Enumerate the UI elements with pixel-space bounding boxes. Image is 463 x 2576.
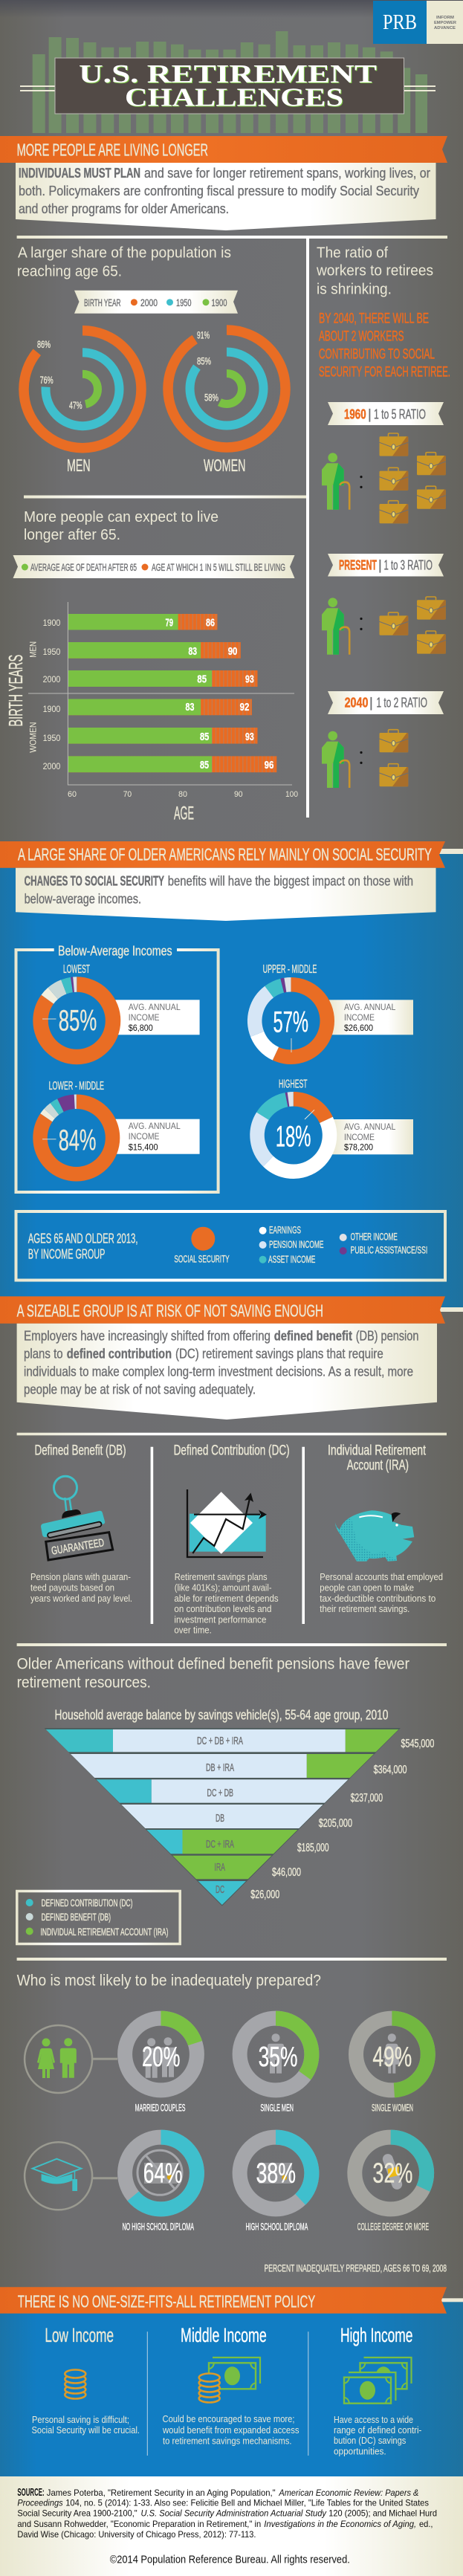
source note: Social Security Area 1900-2100," [17, 2508, 137, 2519]
orange statement: by 2040 [319, 311, 450, 381]
bar chart: life expectancy: BIRTH YEARS [4, 655, 27, 727]
source note: Investigations in the Economics of Aging, [264, 2519, 416, 2529]
column: low income: Low Income [45, 2324, 114, 2346]
column: defined benefit: Pension plans with guaran- [30, 1572, 131, 1582]
heading: ratio of workers [316, 245, 433, 298]
column: middle income: to retirement savings mechanisms. [163, 2435, 291, 2446]
saving callout: defined benefit [274, 1328, 352, 1343]
funnel chart: savings balance: DC [216, 1883, 224, 1896]
column: defined contribution: (like 401Ks); amount avail- [175, 1583, 272, 1593]
donut: married couples: 20% [142, 2042, 180, 2073]
logo: PRB: ADVANCE [434, 26, 456, 30]
divider [17, 1433, 447, 1435]
donut: upper-middle: $26,600 [344, 1023, 373, 1033]
legend: savings vehicles: DEFINED BENEFIT (DB) [42, 1911, 111, 1923]
icon: coins [65, 2369, 85, 2399]
legend: age of death: AGE AT WHICH 1 IN 5 WILL STILL BE LIVING [152, 562, 285, 573]
intro callout: both. Policymakers are confronting fiscal pressure to modify Social Security [19, 184, 419, 198]
chart: women radial rings: 91% [197, 329, 210, 341]
bar chart: life expectancy: 1900 [43, 619, 60, 628]
copyright: ©2014 Population Reference Bureau. All rights reserved. [110, 2553, 350, 2566]
bar chart: life expectancy: 90 [228, 645, 237, 658]
banner: more people are living longer: MORE PEOPLE ARE LIVING LONGER [17, 140, 208, 159]
legend: birth year: 1900 [211, 297, 227, 308]
heading: live longer: More people can expect to live [24, 509, 218, 525]
donut: lower-middle: LOWER - MIDDLE [49, 1080, 104, 1093]
column: defined benefit: years worked and pay level. [30, 1593, 132, 1604]
background: blue policy section [0, 2302, 463, 2476]
donut: single men [240, 2019, 311, 2114]
legend: age of death: AVERAGE AGE OF DEATH AFTER 65 [30, 562, 137, 573]
bar chart: life expectancy: 2000 [43, 763, 60, 771]
divider [24, 495, 306, 498]
background: blue social security section [0, 854, 463, 1307]
heading: larger share [17, 245, 231, 280]
donut: high school diploma [240, 2138, 311, 2233]
column dividers [147, 2331, 308, 2456]
saving callout: plans to [24, 1347, 63, 1362]
donut: married couples: MARRIED COUPLES [135, 2102, 186, 2114]
ratio ribbon: present: | [378, 558, 382, 573]
legend: age of death [13, 555, 294, 578]
bar chart: life expectancy: 90 [234, 790, 243, 799]
bar chart: life expectancy: WOMEN [28, 722, 39, 753]
heading: inadequately prepared: Who is most likely to be inadequately prepared? [17, 1973, 321, 1990]
saving callout [17, 1324, 437, 1420]
bar chart: life expectancy: 85 [200, 731, 209, 743]
donut: no high school diploma: NO HIGH SCHOOL DIPLOMA [122, 2221, 194, 2233]
column: IRA: Individual Retirement [328, 1443, 427, 1458]
donut: upper-middle: 57% [273, 1006, 308, 1039]
saving callout: (DB) pension [356, 1328, 418, 1343]
donut: lowest: $6,800 [129, 1023, 153, 1033]
background: lower gray section [0, 1307, 463, 2302]
orange statement: by 2040: ABOUT 2 WORKERS [319, 329, 404, 345]
heading: ratio of workers: is shrinking. [317, 282, 392, 298]
divider [17, 1958, 447, 1961]
source note: 120 (2005); and Michael Hurd [328, 2508, 437, 2519]
chart: women radial rings: WOMEN [204, 456, 245, 475]
saving callout: (DC) retirement savings plans that require [175, 1347, 383, 1362]
legend: income sources: EARNINGS [269, 1223, 301, 1235]
icon: guaranteed stamp [41, 1476, 113, 1560]
heading: live longer: longer after 65. [24, 527, 120, 543]
legend: savings vehicles: INDIVIDUAL RETIREMENT ACCOUNT (IRA) [40, 1926, 169, 1938]
chart: men radial rings: 76% [40, 374, 54, 386]
bar chart: life expectancy [4, 602, 298, 824]
donut: lower-middle [25, 1080, 200, 1189]
saving callout: Employers have increasingly shifted from offering [24, 1328, 271, 1343]
logo: PRB: INFORM [436, 16, 454, 20]
donut: college degree or more: 32% [372, 2158, 412, 2190]
bar chart: life expectancy: 96 [265, 759, 273, 771]
source note: David Wise (Chicago: University of Chicago Press, 2012): 77-113. [17, 2529, 256, 2540]
cream accent line beside banner 3 [440, 1307, 463, 1312]
bracket: below-average incomes [16, 944, 218, 1192]
funnel chart: savings balance: DC + DB + IRA [197, 1735, 243, 1747]
legend: birth year: 2000 [140, 297, 158, 308]
decorative green bar chart behind title [33, 31, 427, 133]
heading: fewer resources: retirement resources. [17, 1674, 151, 1692]
icon: investment chart [187, 1489, 267, 1557]
icon: graduation cap in circle [25, 2142, 117, 2210]
donut: upper-middle: INCOME [344, 1012, 375, 1023]
donut: lowest: AVG. ANNUAL [129, 1002, 181, 1012]
source note: U.S. Social Security Administration Actuarial Study [141, 2508, 327, 2519]
banner: no one-size-fits-all [0, 2287, 447, 2314]
banner: not saving enough [0, 1296, 445, 1324]
column: low income: Personal saving is difficult; [32, 2414, 129, 2425]
saving callout: defined contribution [67, 1347, 172, 1362]
bar chart: life expectancy: 70 [123, 790, 132, 799]
logo: PRB: EMPOWER [434, 21, 456, 25]
donut: highest: 18% [276, 1120, 311, 1153]
heading: larger share: reaching age 65. [17, 264, 122, 280]
funnel chart: savings balance: DC + IRA [206, 1838, 234, 1851]
column: defined contribution: Defined Contribution (DC) [174, 1443, 290, 1458]
donut: lower-middle: AVG. ANNUAL [129, 1121, 181, 1131]
chart: men radial rings: 47% [69, 399, 82, 411]
ratio ribbon: 1960: 1960 [344, 407, 366, 422]
column: high income: opportunities. [334, 2446, 386, 2457]
bar chart: life expectancy: 86 [206, 617, 215, 629]
legend: income sources: BY INCOME GROUP [28, 1246, 105, 1261]
funnel chart: savings balance: DB [216, 1812, 224, 1825]
icons: 1 retiree to 2 workers [322, 730, 408, 788]
legend: income sources: ASSET INCOME [268, 1253, 315, 1265]
column: defined contribution: on contribution levels and [174, 1604, 272, 1614]
bar chart: life expectancy: 83 [186, 701, 194, 713]
bar chart: life expectancy: 1900 [43, 705, 60, 714]
column: defined benefit: teed payouts based on [30, 1583, 114, 1593]
donut: single men: SINGLE MEN [260, 2102, 294, 2114]
source note: ed., [419, 2519, 433, 2529]
legend: birth year: BIRTH YEAR [84, 297, 120, 308]
legend: savings vehicles: DEFINED CONTRIBUTION (DC) [42, 1897, 132, 1909]
icons: 1 retiree to 3 workers [322, 597, 446, 655]
source note: James Poterba, "Retirement Security in an Aging Population," [47, 2488, 276, 2498]
bar chart: life expectancy: 80 [178, 790, 187, 799]
donut: highest: INCOME [344, 1132, 375, 1142]
heading: ratio of workers: The ratio of [317, 245, 388, 262]
column: IRA: Account (IRA) [347, 1458, 409, 1474]
bracket: below-average incomes: Below-Average Incomes [58, 944, 172, 959]
source note: 104, no. 5 (2014): 1-33. Also see: Felicitie Bell and Michael Miller, "Life Tables for the United States [65, 2498, 429, 2508]
bar chart: life expectancy: MEN [28, 641, 39, 658]
bar chart: life expectancy: 100 [285, 790, 298, 799]
bar chart: life expectancy: 60 [68, 790, 77, 799]
chart: women radial rings: 85% [197, 355, 211, 367]
icon: couple in circle [25, 2025, 117, 2093]
social security callout: CHANGES TO SOCIAL SECURITY [25, 874, 164, 889]
column: defined contribution: over time. [174, 1625, 212, 1636]
intro callout: and other programs for older Americans. [19, 201, 229, 216]
background: upper gray section [0, 0, 463, 855]
column: high income: range of defined contri- [334, 2424, 421, 2436]
donut: lower-middle: $15,400 [129, 1142, 158, 1153]
donut: upper-middle: AVG. ANNUAL [344, 1002, 396, 1012]
donut: highest [242, 1078, 413, 1186]
title plaque [20, 58, 436, 114]
donut: married couples [125, 2019, 197, 2114]
donut: highest: HIGHEST [279, 1078, 308, 1090]
cream accent line beside banner 2 [439, 849, 463, 854]
legend: income sources: PENSION INCOME [269, 1238, 323, 1250]
column: IRA: people can open to make [320, 1583, 414, 1593]
background: top shading [0, 0, 463, 18]
source note: SOURCE: [17, 2486, 45, 2499]
bar chart: life expectancy: 79 [165, 617, 173, 629]
chart: women radial rings: 58% [204, 391, 218, 403]
column: middle income: Middle Income [181, 2324, 267, 2346]
column: IRA: their retirement savings. [320, 1604, 409, 1614]
social security callout: below-average incomes. [25, 892, 141, 907]
column: high income: High Income [340, 2324, 412, 2346]
donut: high school diploma: 38% [256, 2158, 296, 2190]
icon: stacks of money [344, 2357, 412, 2404]
donut: single women: SINGLE WOMEN [372, 2102, 413, 2114]
title plaque: U.S. RETIREMENT [79, 59, 377, 88]
logo: PRB [373, 1, 463, 44]
chart: men radial rings [24, 331, 141, 475]
intro callout: and save for longer retirement spans, working lives, or [144, 166, 430, 181]
column: low income [31, 2324, 140, 2436]
ratio ribbon: present [328, 554, 444, 577]
donut: lowest [26, 963, 200, 1072]
funnel chart: savings balance: $46,000 [272, 1866, 301, 1879]
banner: more people are living longer [0, 136, 447, 163]
column: low income: Social Security will be crucial. [31, 2424, 140, 2436]
column: defined contribution [174, 1443, 290, 1636]
social security callout [16, 868, 436, 921]
divider [17, 236, 447, 239]
source note: Proceedings [17, 2498, 63, 2508]
bar chart: life expectancy: 1950 [43, 648, 60, 657]
saving callout: people may be at risk of not saving adequately. [24, 1382, 256, 1397]
ratio ribbon: 1960: | [368, 407, 372, 422]
icons: 1 retiree to 5 workers [322, 433, 446, 523]
ratio ribbon: 2040 [328, 691, 444, 714]
bar chart: life expectancy: 93 [245, 731, 254, 743]
funnel chart: savings balance: $205,000 [319, 1817, 352, 1830]
vertical divider [306, 239, 309, 818]
donut: upper-middle: UPPER - MIDDLE [263, 963, 317, 976]
heading: live longer [24, 509, 218, 543]
bar chart: life expectancy: 85 [197, 673, 207, 686]
column: middle income [162, 2324, 300, 2446]
donut: lowest: LOWEST [63, 963, 90, 976]
legend: income sources [16, 1211, 445, 1280]
donut: single men: 35% [259, 2042, 297, 2073]
funnel chart: savings balance [30, 1728, 435, 1906]
donut: no high school diploma [122, 2138, 197, 2233]
ratio ribbon: present: 1 to 3 RATIO [383, 558, 433, 573]
column: IRA: tax-deductible contributions to [320, 1593, 436, 1604]
legend: savings vehicles [17, 1891, 180, 1944]
intro callout [16, 163, 436, 230]
cream accent line beside banner 4 [441, 2298, 463, 2302]
donut: single women [356, 2019, 428, 2114]
intro callout: INDIVIDUALS MUST PLAN [19, 166, 140, 181]
legend: income sources: SOCIAL SECURITY [174, 1253, 230, 1265]
bar chart: life expectancy: 85 [200, 759, 209, 771]
icon: money and coins [199, 2357, 260, 2402]
column: high income: bution (DC) savings [334, 2435, 407, 2446]
column: middle income: Could be encouraged to save more; [162, 2413, 294, 2424]
column: high income: Have access to a wide [334, 2414, 413, 2425]
ratio ribbon: 2040: 1 to 2 RATIO [376, 696, 427, 711]
donut: lower-middle: INCOME [129, 1131, 159, 1142]
ratio ribbon: 2040: | [369, 696, 373, 711]
donut: highest: $78,200 [344, 1142, 373, 1153]
funnel chart: savings balance: $237,000 [351, 1792, 383, 1805]
bar chart: life expectancy: 1950 [43, 734, 60, 743]
ratio ribbon: present: PRESENT [339, 558, 377, 573]
donut: single women: 49% [372, 2042, 412, 2073]
funnel chart: savings balance: $364,000 [374, 1764, 407, 1776]
funnel chart: savings balance: DC + DB [207, 1787, 233, 1799]
column: defined contribution: able for retirement depends [174, 1593, 279, 1604]
column: middle income: would benefit from expanded access [162, 2424, 300, 2436]
funnel chart: savings balance: IRA [214, 1861, 225, 1874]
donut: no high school diploma: 64% [143, 2158, 183, 2190]
bar chart: life expectancy: AGE [174, 803, 194, 824]
donut: lowest: 85% [59, 1005, 97, 1038]
donut: highest: AVG. ANNUAL [344, 1122, 396, 1132]
banner: social security [0, 841, 445, 868]
heading: fewer resources [17, 1656, 409, 1692]
heading: ratio of workers: workers to retirees [316, 263, 433, 279]
ratio ribbon: 1960: 1 to 5 RATIO [374, 407, 426, 422]
icon: piggy bank [335, 1510, 414, 1562]
donut: upper-middle [240, 963, 413, 1072]
ratio ribbon: 1960 [328, 402, 444, 425]
column: high income [334, 2324, 421, 2457]
legend: birth year: 1950 [176, 297, 192, 308]
title plaque: CHALLENGES [125, 83, 343, 111]
legend: income sources: AGES 65 AND OLDER 2013, [28, 1232, 138, 1246]
column: defined benefit: Defined Benefit (DB) [34, 1443, 126, 1458]
bar chart: life expectancy: 2000 [43, 676, 60, 685]
donut: college degree or more [354, 2138, 429, 2233]
donut: lowest: INCOME [129, 1012, 159, 1023]
column: defined contribution: investment performance [174, 1615, 266, 1625]
heading: fewer resources: Older Americans without defined benefit pensions have fewer [17, 1656, 409, 1673]
column: defined contribution: Retirement savings plans [175, 1572, 268, 1582]
chart: men radial rings: 86% [37, 338, 51, 350]
funnel chart: savings balance: $185,000 [297, 1842, 329, 1854]
heading: larger share: A larger share of the population is [18, 245, 231, 262]
legend: income sources: OTHER INCOME [351, 1231, 398, 1243]
icon: guaranteed stamp: GUARANTEED [51, 1536, 105, 1558]
bar chart: life expectancy: 83 [189, 645, 197, 658]
donut: high school diploma: HIGH SCHOOL DIPLOMA [245, 2221, 308, 2233]
column: IRA: Personal accounts that employed [320, 1572, 443, 1582]
bar chart: life expectancy: 92 [240, 701, 249, 713]
column: IRA [320, 1443, 443, 1614]
logo: PRB: PRB [383, 11, 417, 34]
chart: women radial rings [168, 329, 285, 475]
background: cream footer [0, 2476, 463, 2576]
source note [17, 2486, 437, 2540]
chart: men radial rings: MEN [67, 456, 91, 475]
funnel chart: savings balance: $545,000 [401, 1738, 435, 1750]
legend: birth year [74, 291, 238, 314]
column: defined benefit [30, 1443, 132, 1604]
donut: lower-middle: 84% [59, 1124, 97, 1157]
divider [17, 1643, 447, 1646]
source note: American Economic Review: Papers & [278, 2488, 418, 2498]
source note: and Susann Rohwedder, "Economic Preparation in Retirement," in [17, 2519, 261, 2529]
social security callout: benefits will have the biggest impact on those with [168, 874, 413, 889]
funnel chart: savings balance: $26,000 [250, 1889, 279, 1901]
bar chart: life expectancy: 93 [245, 673, 254, 686]
column dividers [152, 1447, 303, 1624]
funnel chart: savings balance: DB + IRA [206, 1761, 234, 1774]
ratio ribbon: 2040: 2040 [345, 696, 368, 711]
